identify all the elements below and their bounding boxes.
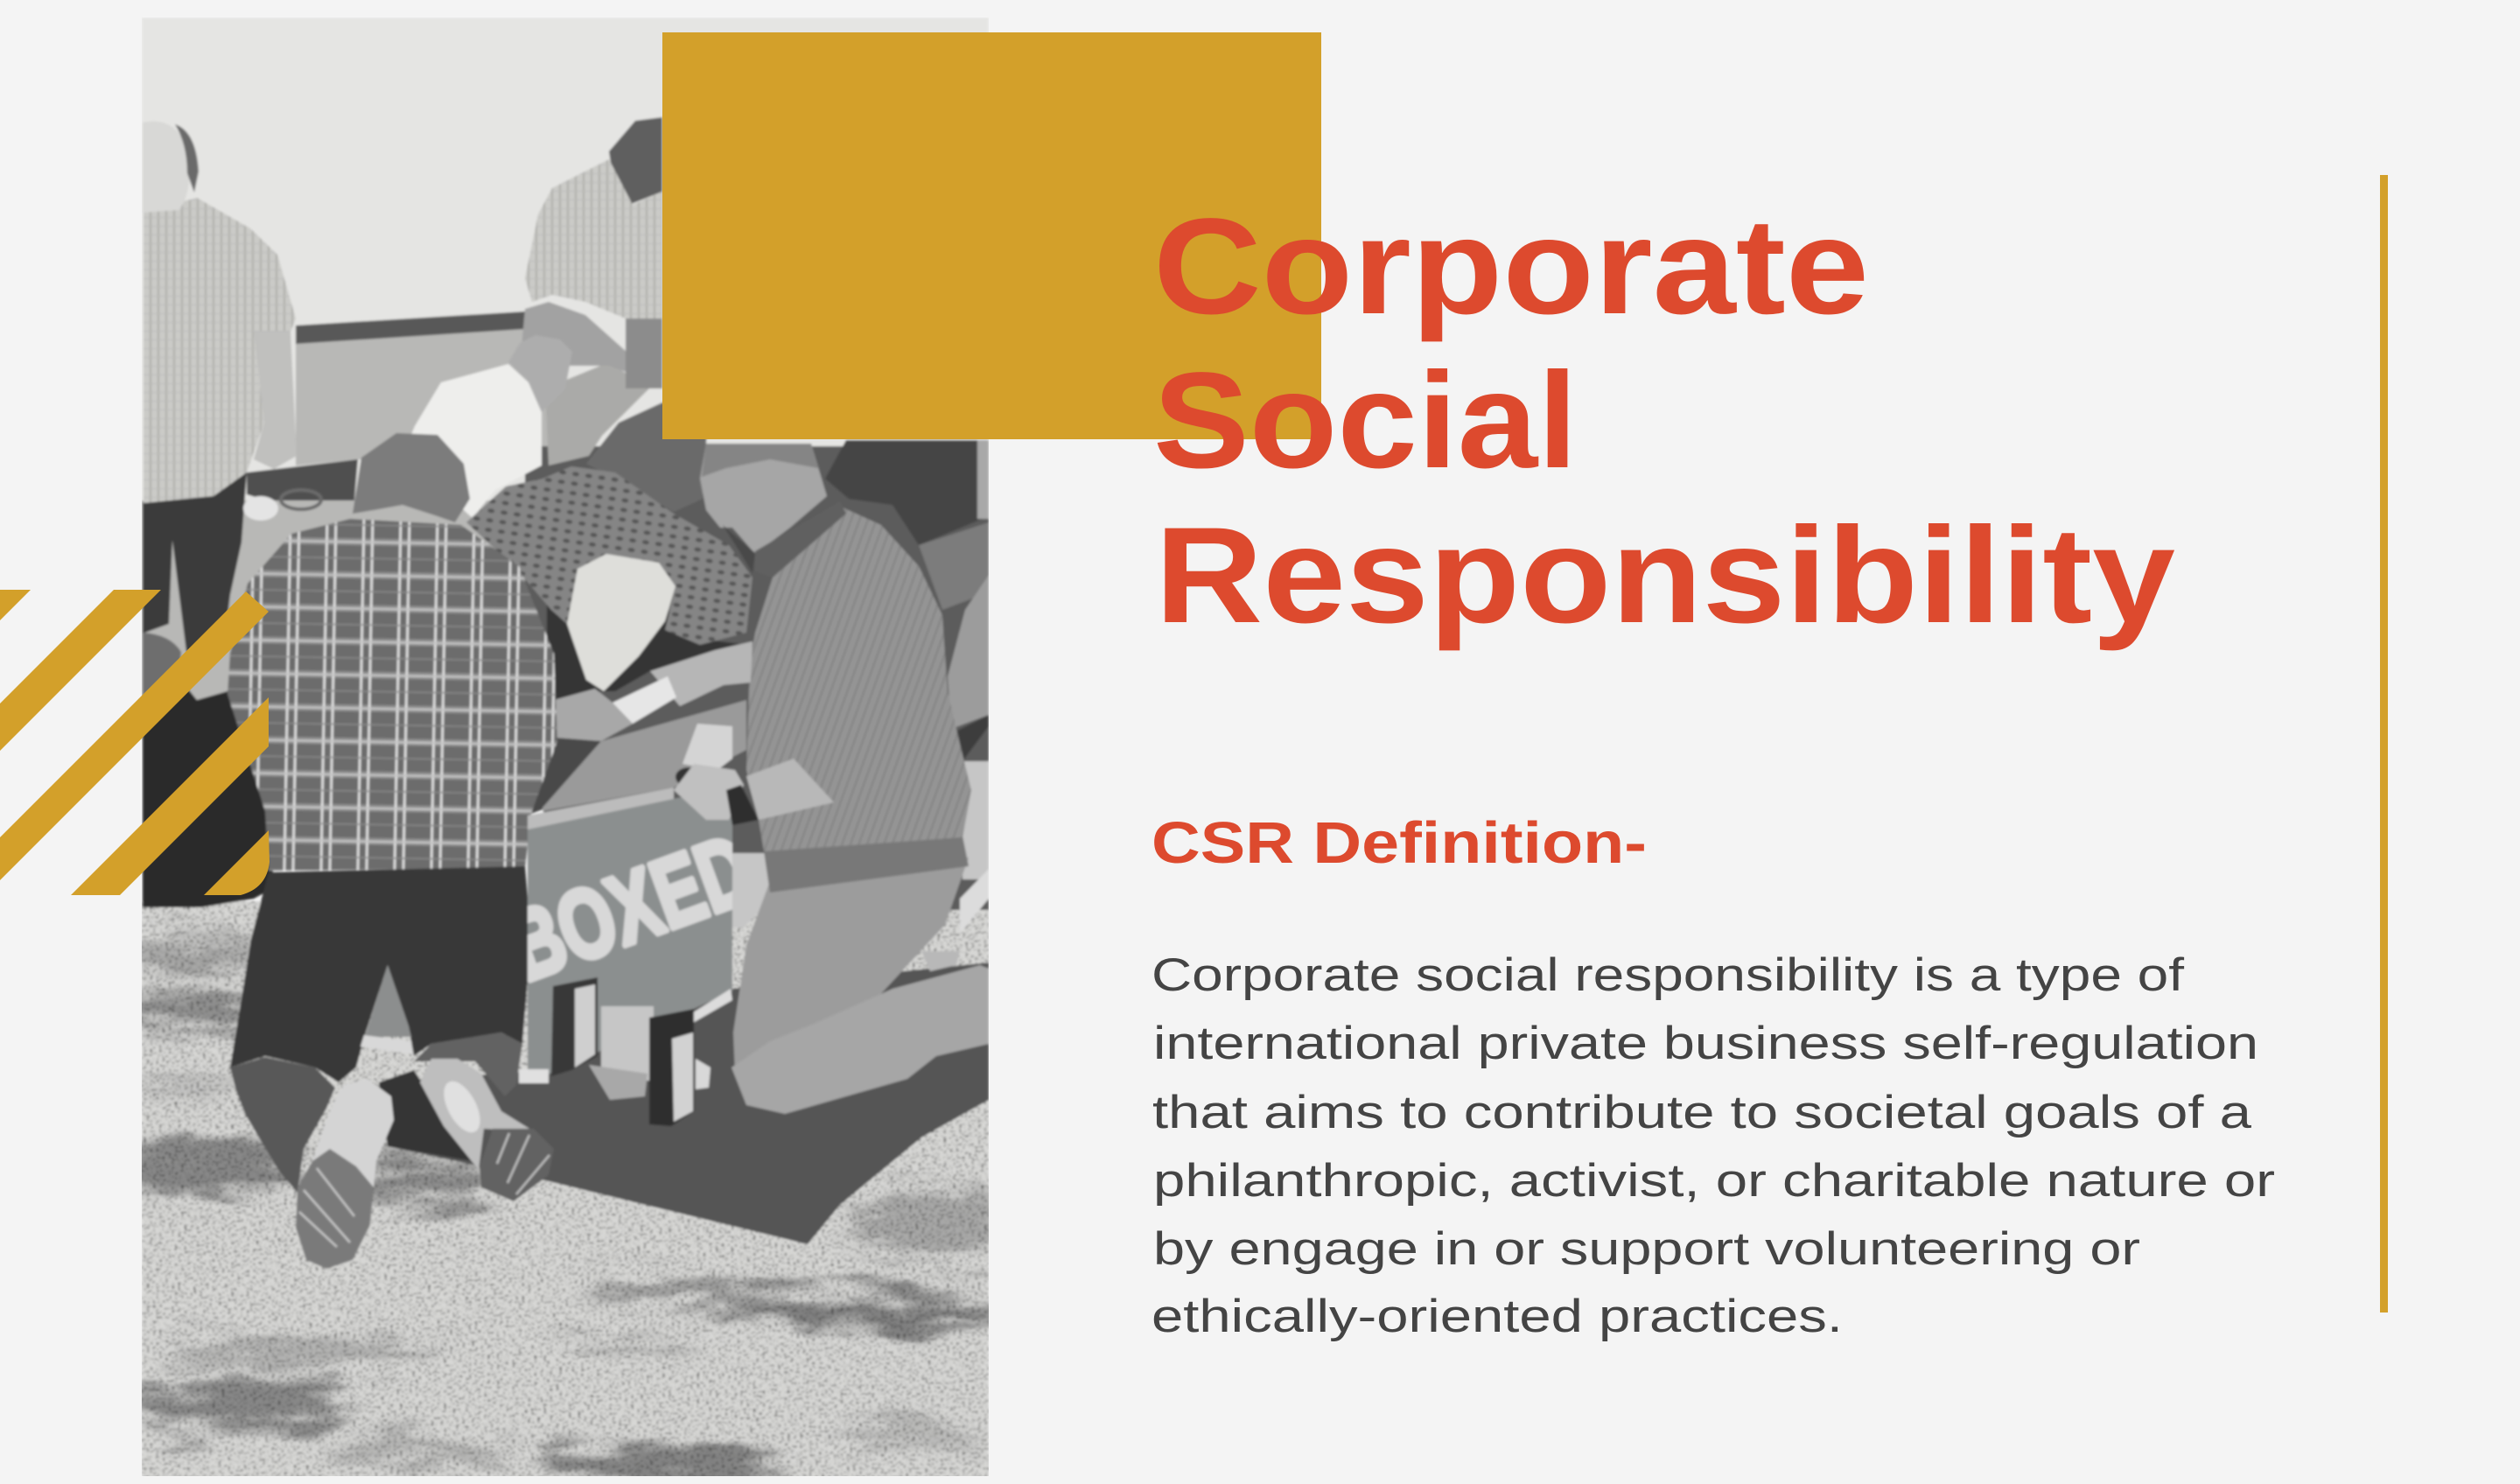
kneeling man in white shirt: [402, 335, 572, 518]
far right dark curve: [954, 715, 989, 761]
right shoe: [420, 1059, 554, 1201]
wall rail: [296, 312, 525, 344]
definition paragraph: [1152, 949, 2275, 1342]
back floor: [142, 499, 525, 702]
waist: [764, 836, 969, 892]
stripe 2: [0, 590, 161, 751]
beard: [723, 525, 755, 573]
light clutter by the box: [732, 853, 774, 928]
shirt: [144, 198, 296, 503]
cable ring: [281, 490, 321, 509]
torso: [746, 508, 971, 851]
plaid shirt man: [228, 433, 557, 1082]
sole treads: [497, 1133, 550, 1194]
can: [682, 724, 732, 770]
box panel between legs: [365, 965, 411, 1037]
grey shoulder: [143, 633, 181, 700]
small white pack: [696, 1059, 710, 1089]
title: [1153, 191, 2175, 652]
forearm: [522, 302, 642, 375]
shin: [732, 965, 989, 1114]
shoe centre: [437, 1075, 487, 1138]
lower wall panel: [296, 329, 560, 466]
baseboard: [247, 459, 358, 505]
title line 2: Social: [1153, 345, 1578, 497]
stripe 1: [0, 590, 31, 620]
shirt: [402, 364, 542, 518]
head: [700, 444, 827, 554]
jeans: [230, 866, 531, 1082]
stripe 5: [204, 830, 270, 895]
trousers: [143, 472, 247, 652]
shoe upper: [420, 1059, 534, 1170]
dark mat: [379, 962, 989, 1244]
knit sweater person: [466, 466, 752, 645]
left calf: [230, 1057, 335, 1193]
shirt: [525, 159, 662, 322]
title line 1: Corporate: [1153, 191, 1869, 343]
head: [609, 117, 662, 205]
open box: [494, 700, 766, 1083]
plaid shirt: [228, 519, 557, 871]
product label left: [575, 984, 595, 1068]
hair: [702, 444, 818, 477]
cardboard box behind legs: [360, 965, 413, 1054]
box lid: [542, 700, 746, 811]
wall: [142, 18, 989, 508]
can base: [676, 767, 702, 787]
left shoe: [296, 1079, 394, 1269]
white item in hand: [612, 676, 676, 724]
box foot: [519, 1069, 549, 1083]
lid edge: [528, 788, 674, 830]
item on mat: [921, 951, 960, 971]
dark person behind stripes: [143, 633, 273, 907]
diagonal stripes: [0, 590, 270, 895]
shoe upper: [312, 1079, 394, 1187]
box base strip: [360, 1035, 413, 1054]
small boxes: [589, 1065, 648, 1100]
box front: [528, 788, 732, 1083]
BOXED logo on box: BOXED: [494, 814, 766, 1002]
man in sweater: [612, 444, 989, 1114]
shadow beneath bent person: [547, 560, 746, 709]
products: [551, 977, 710, 1126]
far right shirt: [825, 440, 989, 545]
line 5: by engage in or support volunteering or: [1153, 1223, 2140, 1275]
person in dark shirt: [586, 402, 709, 512]
floor items: [243, 490, 321, 521]
carpet: [142, 901, 989, 1479]
forearm: [746, 759, 834, 820]
dark ankle: [379, 1070, 472, 1161]
mid-tone area behind the group: [525, 446, 989, 910]
line 3: that aims to contribute to societal goals of a: [1152, 1087, 2252, 1138]
package in hand: [626, 318, 662, 388]
product box left: [551, 977, 598, 1076]
hair: [175, 124, 199, 192]
dark gap above box: [531, 738, 601, 814]
gold square: [662, 32, 1321, 439]
head: [508, 335, 572, 412]
product box right: [649, 1009, 694, 1126]
title line 3: Responsibility: [1155, 500, 2175, 652]
arm beside box: [554, 689, 633, 741]
trousers: [545, 362, 649, 466]
middle cans: [601, 1006, 654, 1081]
head: [143, 122, 190, 213]
shoe sole: [296, 1149, 374, 1269]
line 2: international private business self-regulation: [1153, 1018, 2258, 1069]
hair: [353, 433, 470, 522]
far right light items: [962, 761, 989, 879]
right calf: [414, 1032, 522, 1096]
light strip on far right: [960, 869, 989, 934]
upper hand: [650, 641, 752, 706]
line 1: Corporate social responsibility is a type of: [1152, 949, 2184, 1001]
far right lower leg: [948, 575, 989, 729]
box lower edge: [678, 989, 732, 1024]
carpet speckle: [142, 901, 989, 1479]
standing man left: [143, 122, 297, 652]
white beanie: [567, 554, 676, 691]
vertical accent line: [2380, 175, 2388, 1312]
collar: [755, 501, 846, 578]
standing man behind panel: [522, 117, 662, 466]
sole treads: [299, 1168, 354, 1247]
subheading: CSR Definition-: [1152, 810, 1647, 876]
stripe 3: [0, 592, 269, 880]
dark body: [143, 678, 273, 907]
line 4: philanthropic, activist, or charitable nature or: [1153, 1155, 2275, 1207]
shoe sole: [480, 1129, 554, 1201]
carpet tonal patches: [105, 938, 1024, 1484]
product label right: [672, 1032, 693, 1122]
lower hand: [674, 764, 744, 820]
watch: [726, 785, 759, 825]
photo: volunteers packing boxes: [105, 18, 1024, 1484]
stripe 4: [71, 697, 269, 895]
far right jeans: [919, 522, 989, 610]
thigh: [733, 858, 969, 1074]
far right strip: [977, 440, 989, 519]
person on far right: [825, 440, 989, 879]
arm: [254, 332, 297, 469]
white bag: [243, 496, 278, 521]
calves: [230, 1032, 522, 1193]
line 6: ethically-oriented practices.: [1152, 1291, 1843, 1342]
